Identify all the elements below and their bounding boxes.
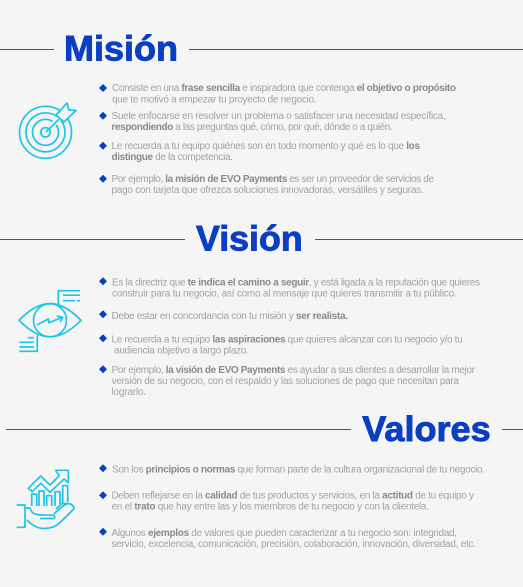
bullet: equipo	[99, 141, 420, 163]
bullet: necesidad específica: respondiendo a las preguntas qué, cómo, por qué, dónde o a quién.	[112, 122, 393, 133]
section: Misión	[0, 30, 523, 196]
bullet list: Misión	[99, 83, 456, 196]
bullet: principios: Son los principios o normas que forman parte de la cultura organizacional de tu negocio.	[112, 465, 485, 476]
section: Valores	[6, 410, 523, 550]
bullet: necesidad específica: Suele enfocarse en resolver un problema o satisfacer una necesidad específica,	[112, 111, 446, 122]
bullet: equipo: distingue de la competencia.	[112, 152, 233, 163]
bullet: frase sencilla: que te motivó a empezar tu proyecto de negocio.	[112, 95, 317, 106]
bullet: aspiraciones: audiencia objetivo a largo plazo.	[114, 345, 249, 356]
bullet: calidad: Deben reflejarse en la calidad de tus productos y servicios, en la actitud de tu equipo y	[112, 491, 474, 502]
bullet: frase sencilla: Consiste en una frase sencilla e inspiradora que contenga el objetivo o propósito	[112, 83, 456, 94]
bullet: frase sencilla	[99, 83, 456, 106]
icon: target with arrow	[20, 103, 76, 158]
bullet: ejemplo EVO Payments misión: pago con tarjeta que ofrezca soluciones innovadoras, versátiles y seguras.	[112, 185, 424, 196]
bullet: calidad	[99, 491, 474, 513]
bullet: concordancia: Debe estar en concordancia con tu misión y ser realista.	[112, 311, 348, 322]
heading: Valores: Valores	[362, 410, 491, 449]
bullet: ejemplo EVO Payments misión: Por ejemplo, la misión de EVO Payments es ser un proveedor de servicios de	[112, 174, 434, 185]
icon: hand holding growth chart	[17, 470, 74, 528]
bullet: ejemplo EVO Payments visión: Por ejemplo, la visión de EVO Payments es ayudar a sus clientes a desarrollar la mejor	[112, 365, 476, 376]
bullet: directriz: Es la directriz que te indica el camino a seguir, y está ligada a la reputación que quieres	[112, 278, 480, 288]
bullet list: Visión	[99, 277, 480, 398]
bullet: ejemplo EVO Payments misión	[99, 174, 434, 196]
bullet: ejemplo EVO Payments visión: lograrlo.	[112, 387, 146, 398]
icon: eye with chart and documents	[19, 291, 81, 351]
bullet: directriz: construir para tu negocio, así como al mensaje que quieres transmitir a tu público.	[112, 289, 457, 300]
bullet: ejemplo EVO Payments visión	[99, 365, 476, 398]
bullet: directriz	[99, 277, 480, 300]
section: Visión	[0, 220, 523, 398]
bullet: necesidad específica	[99, 111, 446, 133]
bullet: ejemplos: Algunos ejemplos de valores que pueden caracterizar a tu negocio son: integridad,	[112, 528, 457, 539]
heading: Visión: Visión	[196, 220, 303, 258]
bullet: ejemplos: servicio, excelencia, comunicación, precisión, colaboración, innovación, diversidad, etc.	[112, 539, 476, 550]
bullet: calidad: en el trato que hay entre las y los miembros de tu negocio y con la clientela.	[112, 502, 429, 513]
bullet list: Valores	[99, 464, 485, 550]
heading: Misión: Misión	[64, 30, 178, 68]
bullet: aspiraciones: Le recuerda a tu equipo las aspiraciones que quieres alcanzar con tu negocio y/o tu	[112, 334, 463, 345]
bullet: ejemplo EVO Payments visión: versión de su negocio, con el respaldo y las soluciones de pago que necesitan para	[112, 376, 459, 387]
bullet: equipo: Le recuerda a tu equipo quiénes son en todo momento y qué es lo que los	[112, 141, 420, 152]
bullet: ejemplos	[99, 528, 476, 550]
bullet: aspiraciones	[99, 334, 463, 356]
